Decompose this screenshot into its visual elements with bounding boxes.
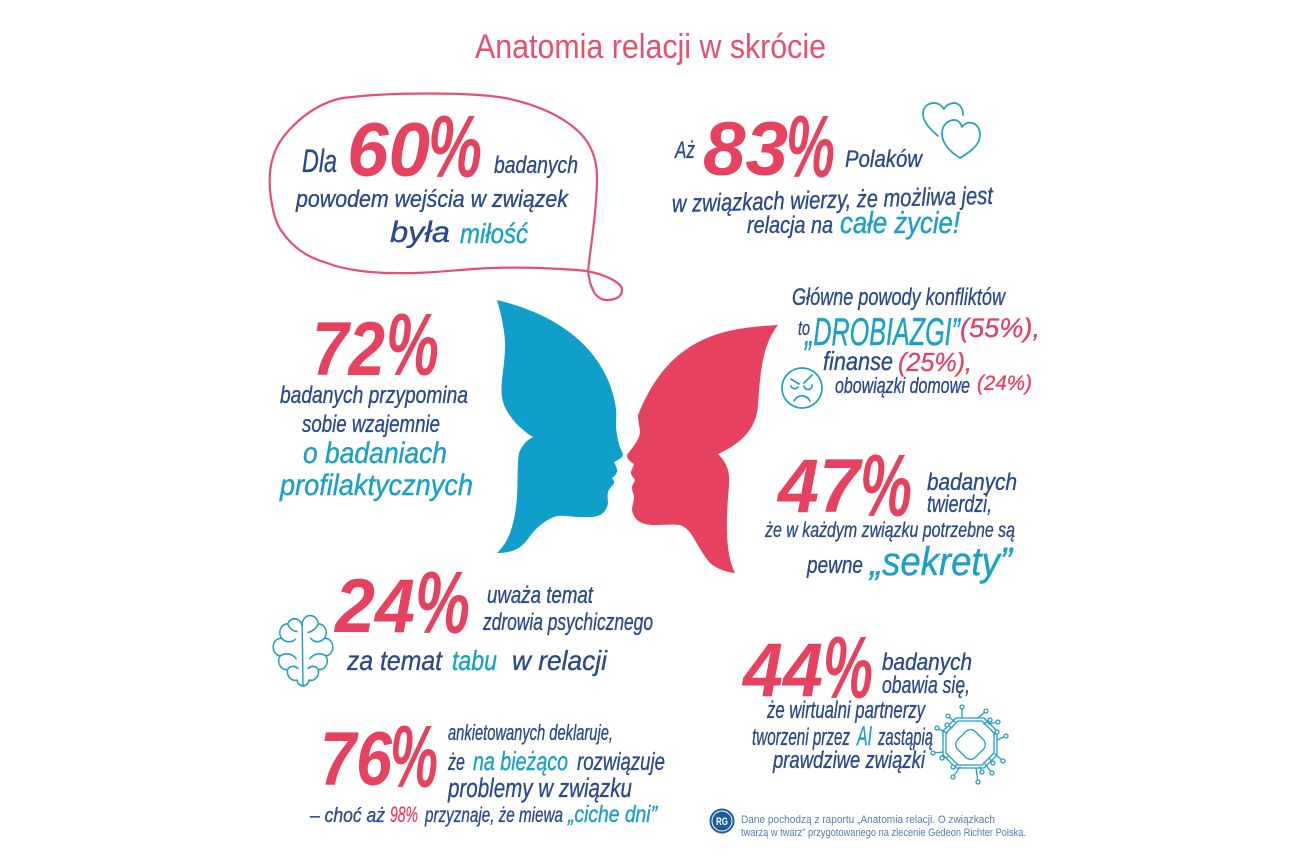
footer source note: twarzą w twarz” przygotowanego na zlecenie Gedeon Richter Polska. bbox=[741, 827, 1026, 839]
stat: conflicts: (24%) bbox=[977, 372, 1032, 395]
stat: 44%: zastąpią bbox=[877, 724, 933, 751]
stat: 24%: 24 bbox=[333, 564, 415, 649]
icon: angry face bbox=[782, 368, 822, 408]
icon: AI chip bbox=[931, 705, 1008, 784]
stat: 72%: sobie wzajemnie bbox=[302, 411, 440, 438]
stat: 76%: 98% bbox=[390, 802, 418, 827]
stat: 47%: badanych bbox=[927, 469, 1017, 496]
stat: 72%: % bbox=[386, 295, 439, 394]
icon: brain bbox=[273, 616, 333, 686]
stat: 83%: 83 bbox=[703, 107, 788, 192]
stat text: 60% bbox=[295, 97, 578, 249]
stat: conflicts bbox=[792, 284, 1040, 398]
stat: 44%: badanych bbox=[882, 649, 972, 676]
stat: 24%: uważa temat bbox=[487, 582, 594, 609]
stat: 76%: przyznaje, że miewa bbox=[424, 804, 563, 827]
stat: 76%: problemy w związku bbox=[447, 773, 632, 803]
icon: hearts bbox=[923, 103, 980, 158]
stat: 47%: 47 bbox=[776, 444, 864, 529]
stat: 44%: że wirtualni partnerzy bbox=[766, 697, 926, 724]
butterfly faces bbox=[497, 300, 778, 573]
stat: 44%: 44 bbox=[741, 628, 823, 713]
stat: 76%: że bbox=[447, 749, 465, 776]
stat text: 60%: była bbox=[390, 216, 450, 249]
stat text: 60%: 60 bbox=[347, 108, 430, 193]
footer source note: Dane pochodzą z raportu „Anatomia relacji. O związkach bbox=[741, 814, 995, 826]
stat: 44%: prawdziwe związki bbox=[772, 747, 926, 774]
stat: 76%: na bieżąco bbox=[473, 746, 568, 776]
stat: conflicts: finanse bbox=[823, 346, 893, 376]
stat: 72%: 72 bbox=[312, 307, 385, 392]
stat: 44%: obawia się, bbox=[882, 672, 970, 699]
stat: 72%: o badaniach bbox=[303, 437, 447, 470]
red wing face bbox=[627, 325, 778, 573]
title: Anatomia relacji w skrócie bbox=[475, 28, 826, 66]
stat: 72% bbox=[279, 295, 473, 502]
stat: conflicts: Główne powody konfliktów bbox=[792, 284, 1006, 311]
speech bubble: 60% bbox=[270, 94, 622, 300]
stat text: 60%: powodem wejścia w związek bbox=[295, 186, 570, 213]
stat text: 60%: miłość bbox=[460, 218, 528, 249]
stat: conflicts: (25%), bbox=[898, 347, 972, 377]
stat: 83% bbox=[672, 97, 994, 240]
stat: 76%: ankietowanych deklaruje, bbox=[448, 720, 613, 745]
stat: 47% bbox=[764, 436, 1017, 584]
stat: 24%: za temat bbox=[346, 645, 443, 676]
stat: 76%: rozwiązuje bbox=[577, 748, 665, 776]
stat: 72%: badanych przypomina bbox=[280, 382, 468, 409]
stat: 24%: w relacji bbox=[512, 645, 608, 676]
stat: 83%: w związkach wierzy, że możliwa jest bbox=[672, 182, 994, 218]
stat: 47%: % bbox=[860, 436, 912, 535]
stat: conflicts: to bbox=[798, 318, 810, 340]
stat: 83%: relacja na bbox=[747, 212, 833, 239]
stat: 44% bbox=[741, 618, 972, 774]
stat: 83%: % bbox=[786, 97, 835, 196]
stat: conflicts: obowiązki domowe bbox=[835, 373, 970, 398]
stat: 44%: tworzeni przez bbox=[752, 724, 850, 751]
stat: 47%: twierdzi, bbox=[927, 491, 992, 518]
stat text: 60%: % bbox=[428, 97, 482, 196]
stat: 47%: „sekrety” bbox=[868, 540, 1014, 584]
stat: 76%: % bbox=[390, 707, 438, 806]
stat: 44%: AI bbox=[856, 721, 872, 751]
stat text: 60%: Dla bbox=[302, 143, 337, 179]
footer logo: RG bbox=[716, 816, 728, 828]
stat: 76%: 76 bbox=[320, 717, 393, 802]
footer logo bbox=[710, 808, 734, 834]
blue wing face bbox=[497, 300, 623, 553]
stat: 47%: pewne bbox=[806, 552, 863, 579]
stat: 83%: Polaków bbox=[845, 146, 923, 173]
stat: 76% bbox=[309, 707, 665, 827]
stat: 24%: tabu bbox=[452, 645, 497, 676]
stat: 24% bbox=[333, 553, 653, 676]
stat: 83%: Aż bbox=[674, 137, 695, 164]
stat: 76%: „ciche dni” bbox=[567, 801, 658, 827]
stat: 47%: że w każdym związku potrzebne są bbox=[764, 519, 1015, 542]
stat: conflicts: (55%), bbox=[960, 313, 1040, 343]
footer source note bbox=[741, 814, 1026, 839]
stat: 76%: – choć aż bbox=[309, 805, 385, 827]
stat: 24%: zdrowia psychicznego bbox=[482, 609, 653, 636]
stat: 72%: profilaktycznych bbox=[279, 469, 473, 502]
stat: conflicts: „DROBIAZGI” bbox=[804, 311, 961, 354]
stat: 24%: % bbox=[415, 553, 470, 652]
stat: 44%: % bbox=[823, 618, 873, 717]
stat: 83%: całe życie! bbox=[840, 205, 960, 240]
stat text: 60%: badanych bbox=[494, 152, 578, 179]
